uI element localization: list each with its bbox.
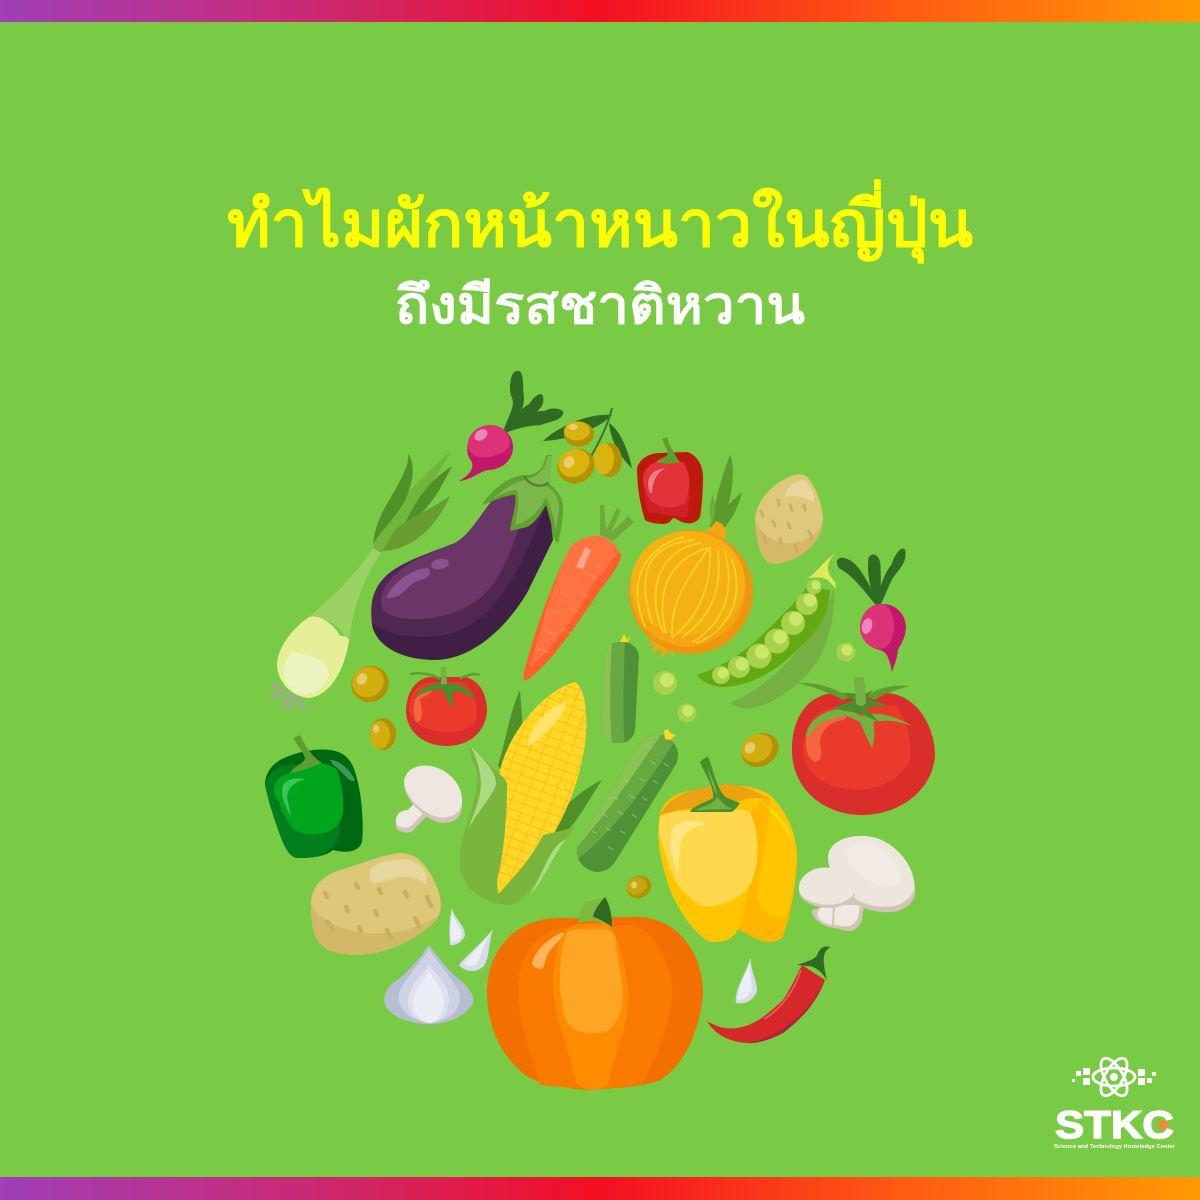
bottom gradient bar	[0, 1177, 1200, 1200]
icon: carrot	[523, 505, 634, 680]
logo side squares	[1072, 1068, 1156, 1085]
top gradient bar	[0, 0, 1200, 22]
icon: corn	[460, 682, 602, 905]
icon: green pepper	[265, 735, 363, 858]
logo: STKC	[1054, 1054, 1176, 1150]
icon: cucumber flower	[664, 729, 676, 740]
icon: radish top	[459, 372, 562, 481]
icon: pea pod	[697, 553, 836, 708]
subtitle: ถึงมีรสชาติหวาน	[395, 277, 805, 335]
title: ทำไมผักหน้าหนาวในญี่ปุ่น	[227, 179, 973, 264]
icon: potato lower	[311, 853, 441, 955]
icon: mushroom left	[396, 766, 462, 833]
icon: garlic cloves	[449, 908, 757, 1003]
icon: large cucumber	[576, 734, 678, 872]
logo: STKC: STKC	[1055, 1104, 1174, 1147]
icon: potato upper	[755, 475, 823, 564]
icon: pumpkin	[487, 897, 703, 1090]
icon: onion	[629, 455, 753, 658]
icon: leek	[272, 450, 452, 710]
icon: garlic	[384, 945, 473, 1030]
icon: chili pepper	[707, 946, 830, 1043]
icon: small cucumber	[601, 634, 639, 743]
icon: small tomato	[406, 667, 487, 746]
logo atom icon	[1093, 1054, 1135, 1100]
icon: red pepper	[637, 437, 703, 524]
icon: radish right	[838, 550, 906, 672]
icon: large tomato	[792, 677, 935, 815]
icon: eggplant	[371, 455, 563, 660]
icon: loose peas	[653, 642, 856, 722]
icon: small olives	[345, 660, 785, 903]
icon: yellow pepper	[658, 757, 797, 942]
logo: STKC: Science and Technology Knowledge Center	[1054, 1144, 1176, 1150]
icon: mushrooms right	[799, 836, 915, 931]
icon: olives on branch	[543, 408, 632, 489]
